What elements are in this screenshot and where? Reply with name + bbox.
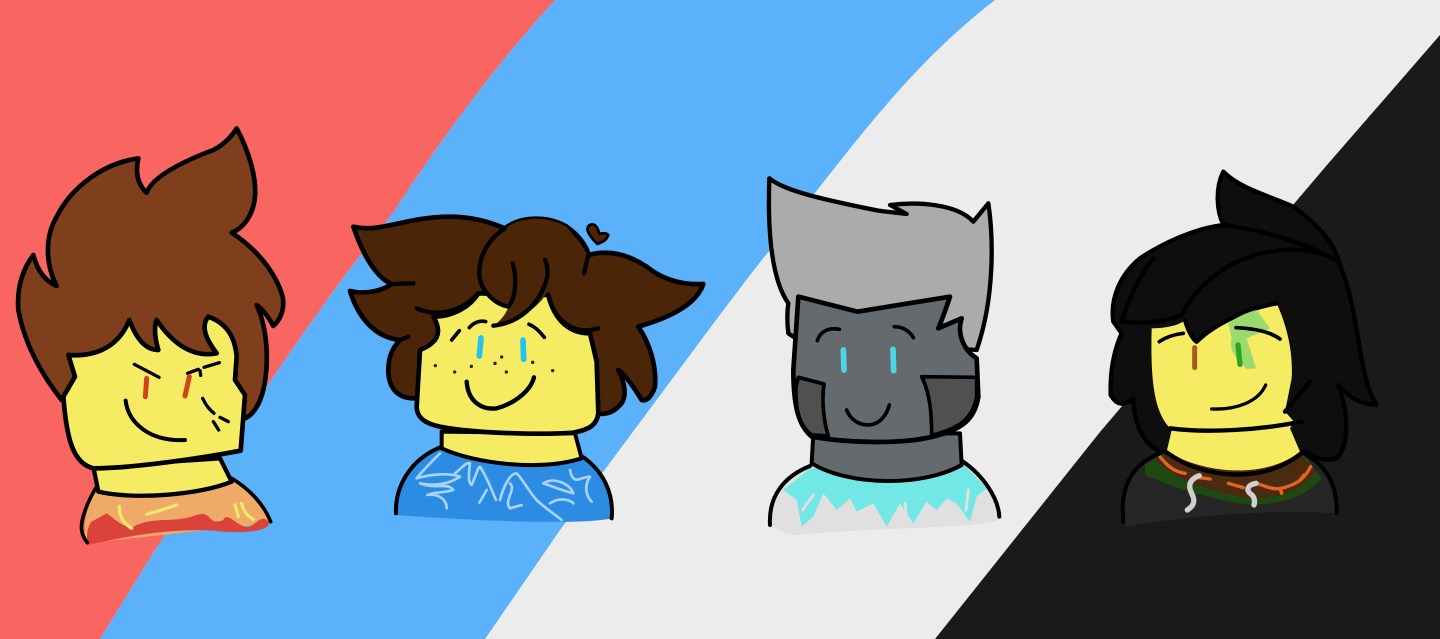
hair (769, 178, 992, 350)
facial features (435, 321, 553, 409)
shirt (770, 461, 999, 535)
face (417, 293, 598, 434)
character: black hair with green scar (1111, 172, 1377, 527)
hoodie (1121, 453, 1337, 527)
hood strings (1187, 476, 1256, 510)
hair (350, 217, 703, 414)
main hair (1111, 225, 1377, 460)
heart (587, 224, 608, 244)
shirt (81, 478, 271, 545)
character: grey robot with cyan eyes (769, 178, 999, 535)
head (793, 297, 978, 442)
facial features (817, 327, 913, 425)
neck (812, 433, 962, 481)
neck (442, 432, 582, 465)
green scar (1228, 310, 1270, 369)
shirt (396, 447, 612, 522)
forelock (479, 219, 588, 326)
face (63, 317, 245, 468)
right cheek panel (922, 377, 977, 435)
hair (18, 128, 283, 418)
hair and neck lines (1122, 250, 1338, 475)
character: blue-themed with freckles and heart (350, 217, 703, 522)
character: red-themed with brown spiky hair (18, 128, 283, 545)
top hair spike (1218, 172, 1340, 265)
face and neck (1151, 303, 1300, 470)
forelock and fringe lines (392, 228, 598, 340)
facial features (126, 363, 228, 440)
facial features (1159, 328, 1280, 409)
left cheek panel (796, 377, 828, 436)
neck (93, 458, 232, 496)
